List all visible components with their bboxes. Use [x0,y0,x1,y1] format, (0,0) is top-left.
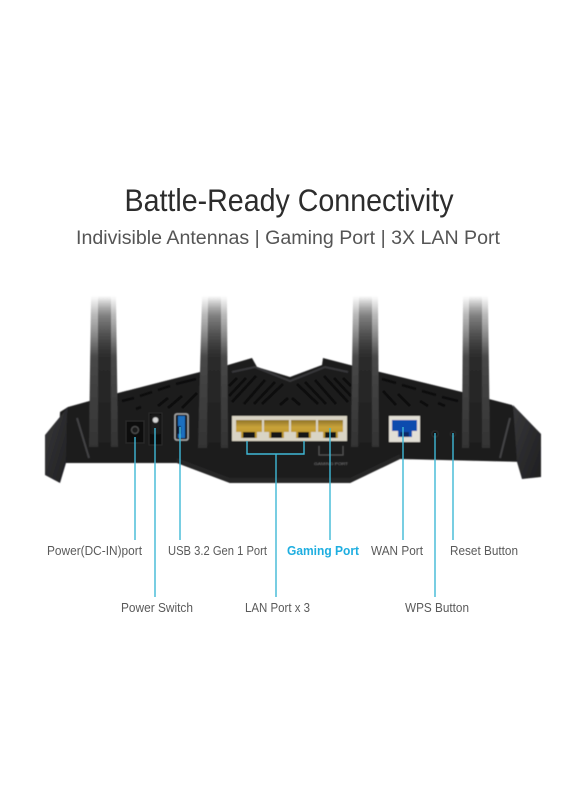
router body [58,358,525,483]
line: power switch [154,428,156,597]
gaming port silk label: GAMING PORT [314,462,349,466]
label: WAN: WAN Port [371,544,423,558]
antenna 2 [198,296,228,448]
right wing [513,405,541,479]
line: WAN [402,427,404,540]
label: WPS: WPS Button [405,601,469,615]
vents [122,376,458,409]
left wing [45,407,68,483]
line: power port [134,437,136,540]
antenna 1 [89,296,118,447]
LAN port 3 [291,420,316,438]
callout lines [135,427,453,597]
line: USB [179,427,181,540]
label: reset: Reset Button [450,544,518,558]
label: LAN: LAN Port x 3 [245,601,310,615]
power switch [149,413,162,445]
lower panel shade [177,454,400,483]
LAN port 2 [264,420,289,438]
reset hole [450,432,456,436]
gaming port bracket [319,446,343,455]
WPS hole [432,431,438,437]
antenna 4 [462,296,490,448]
label: gaming port: Gaming Port [287,544,360,558]
WAN port [389,416,420,442]
line: reset [452,433,454,540]
LAN port 1 [236,420,262,438]
power DC-in port [126,421,144,443]
LAN and gaming port block [232,416,347,441]
router [45,296,541,483]
line: WPS [434,433,436,597]
label: power switch: Power Switch [121,601,193,615]
label: USB: USB 3.2 Gen 1 Port [168,544,267,558]
antenna 3 [351,296,379,447]
line: gaming port [329,428,331,540]
USB port [175,414,188,440]
wing accents [77,418,510,458]
gaming port [318,420,343,438]
body top highlight [232,367,348,381]
callout labels [47,544,518,615]
line: LAN bracket [247,441,304,597]
label: power port: Power(DC-IN)port [47,544,142,558]
title: Battle-Ready Connectivity [124,182,454,218]
subtitle: Indivisible Antennas | Gaming Port | 3X LAN Port [76,228,501,249]
